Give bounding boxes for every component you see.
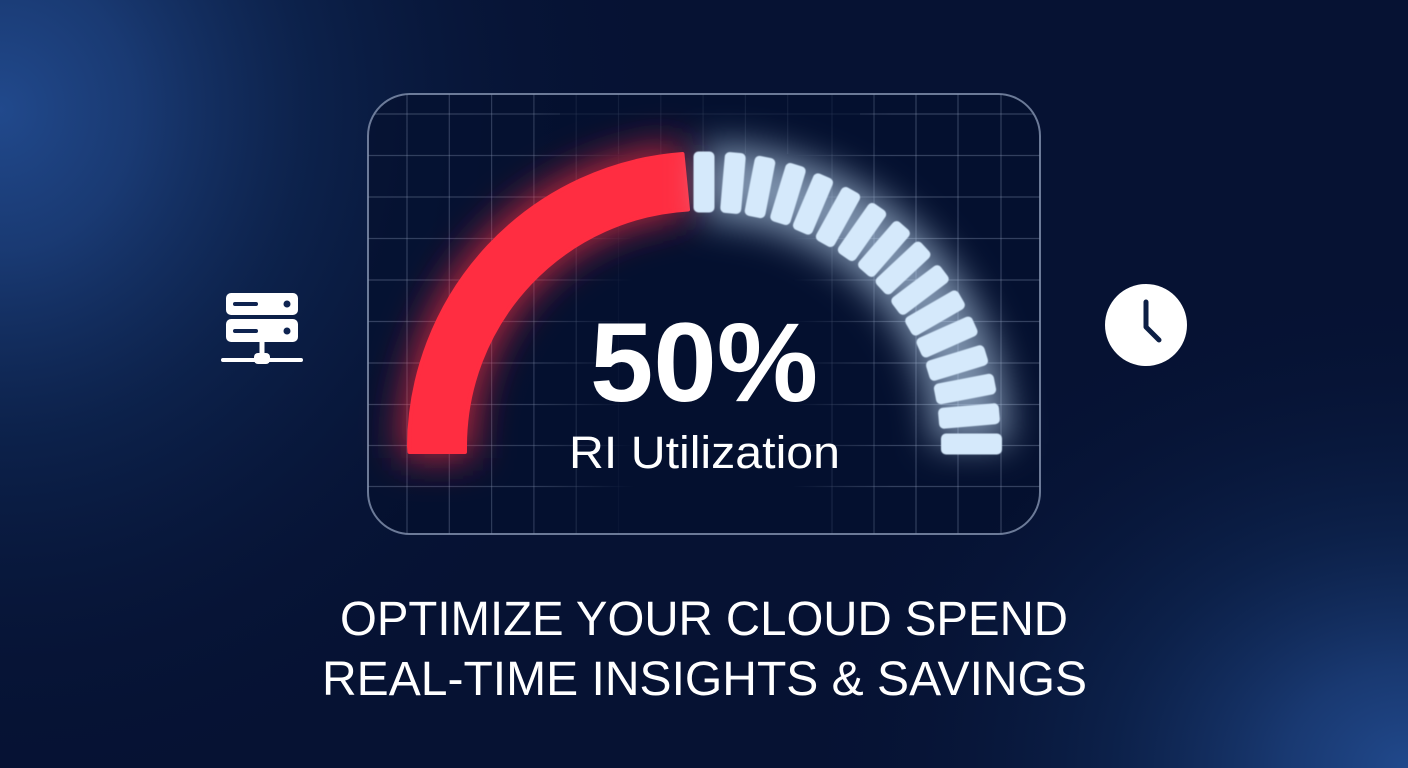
icon: server network: [221, 293, 303, 364]
gauge value: 50%: 50%: [590, 300, 818, 425]
headline: [322, 593, 1087, 706]
icon: clock: [1105, 284, 1187, 366]
headline: OPTIMIZE YOUR CLOUD SPEND: [340, 593, 1068, 646]
headline: REAL-TIME INSIGHTS & SAVINGS: [322, 653, 1087, 706]
gauge label: RI Utilization: RI Utilization: [569, 427, 840, 478]
panel: gauge card with grid: [368, 94, 1040, 534]
gauge: red utilized arc: [409, 154, 688, 458]
gauge: remaining capacity segments: [694, 152, 1002, 454]
